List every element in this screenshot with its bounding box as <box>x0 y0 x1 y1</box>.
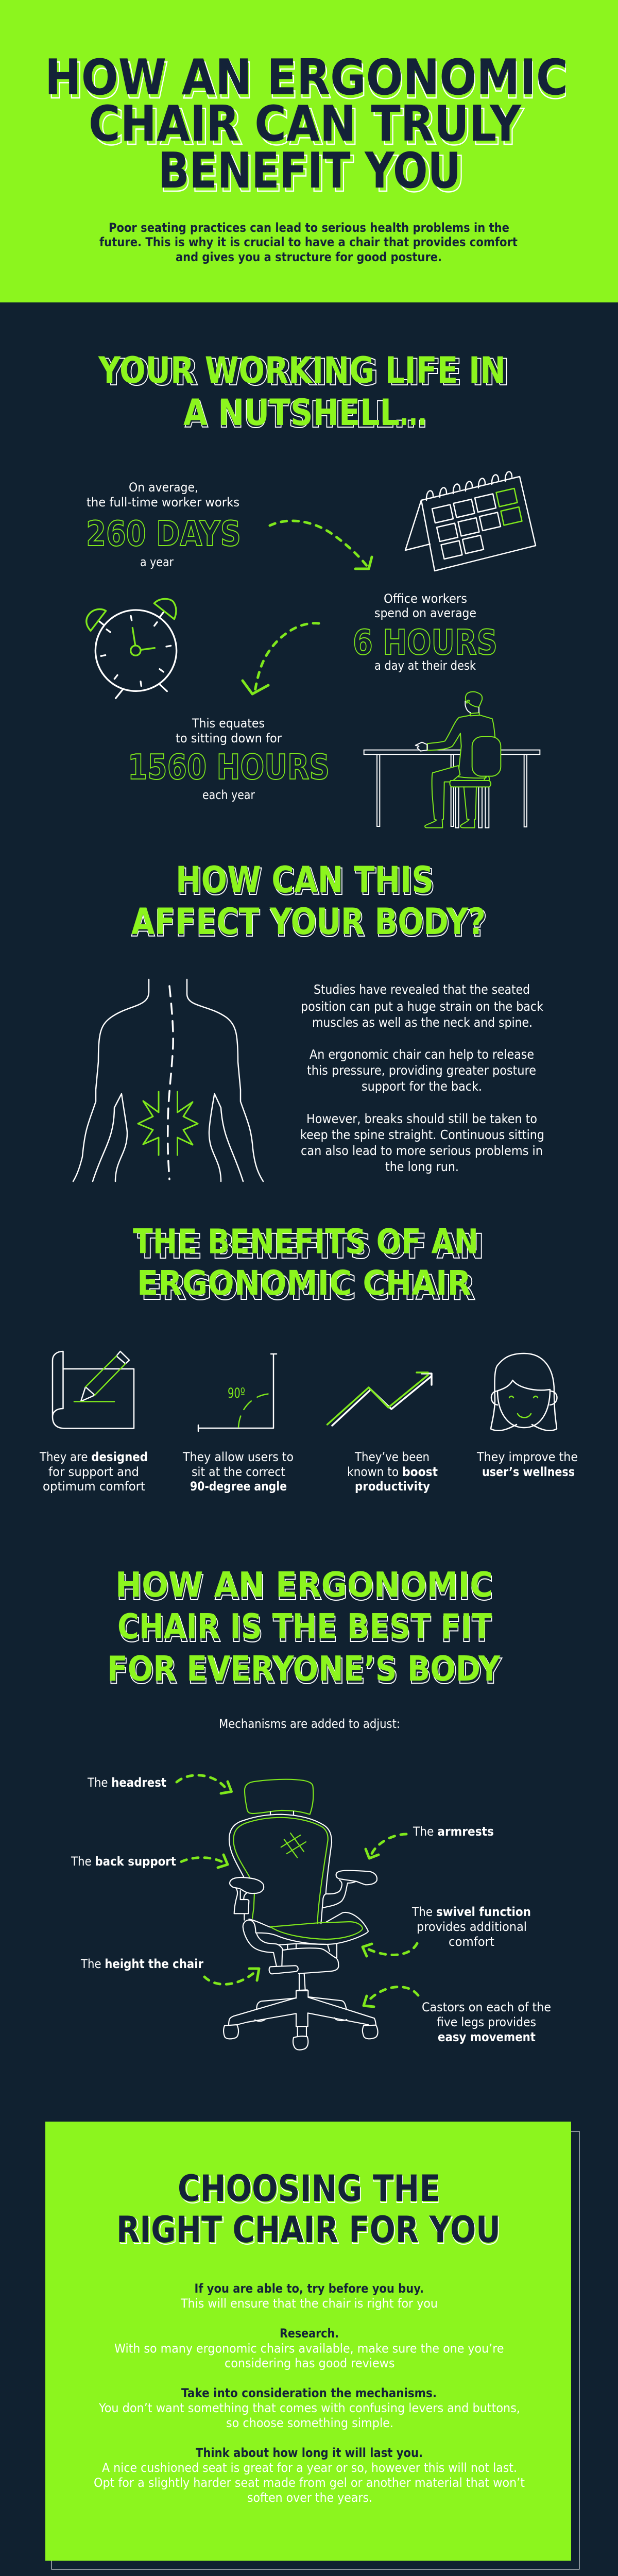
heading: choosing <box>116 2167 501 2252</box>
text block: body effects: the long run. <box>385 1159 459 1174</box>
stat: 260 days: a year <box>140 555 174 569</box>
heading: best fit for everyone: HOW AN ERGONOMIC <box>115 1565 493 1605</box>
tip: mechanisms: Take into consideration the mechanisms. <box>181 2386 437 2400</box>
tip: mechanisms: so choose something simple. <box>226 2416 393 2430</box>
label: height: The height the chair <box>80 1957 203 1971</box>
text block: body effects: this pressure, providing greater posture <box>307 1063 536 1078</box>
title: BENEFIT YOU <box>158 143 461 199</box>
heading: your working life: YOUR WORKING LIFE IN <box>98 349 506 392</box>
stat: 6 hours: 6 HOURS <box>353 622 497 663</box>
label: castors <box>364 1987 551 2044</box>
heading: your working life: A NUTSHELL <box>183 392 400 434</box>
heading: the benefits: THE BENEFITS OF AN <box>138 1227 484 1266</box>
label: castors: easy movement <box>438 2030 536 2044</box>
text: benefit angle: sit at the correct <box>192 1465 285 1479</box>
text: benefit wellness: They improve the <box>476 1450 578 1464</box>
heading: choosing: CHOOSING THE <box>178 2167 440 2210</box>
tip: how long it will last: soften over the years. <box>247 2490 372 2505</box>
label: castors: five legs provides <box>437 2015 536 2029</box>
tip: try before you buy: If you are able to, try before you buy. <box>195 2281 424 2296</box>
heading: best fit for everyone: FOR EVERYONE’S BODY <box>107 1649 501 1689</box>
heading: best fit for everyone <box>107 1565 502 1691</box>
text: benefit designed: for support and <box>48 1465 139 1479</box>
tip: research: considering has good reviews <box>225 2356 394 2370</box>
text: benefit productivity <box>347 1450 438 1494</box>
tip: how long it will last <box>94 2446 525 2505</box>
text: benefit designed: optimum comfort <box>43 1479 145 1494</box>
label: armrests <box>366 1824 494 1858</box>
heading: your working life: A NUTSHELL... <box>185 394 428 436</box>
tip: mechanisms <box>98 2386 520 2430</box>
text: benefit productivity: productivity <box>355 1479 430 1494</box>
tip: research: With so many ergonomic chairs available, make sure the one you’re <box>114 2341 504 2355</box>
text block: body effects: can also lead to more serious problems in <box>301 1143 543 1158</box>
heading: how can this affect your body: HOW CAN THIS <box>177 861 435 903</box>
heading: the benefits: ERGONOMIC CHAIR <box>137 1263 471 1303</box>
label: back support: The back support <box>71 1854 176 1869</box>
text: benefit designed: They are designed <box>39 1450 148 1464</box>
text: benefit angle: They allow users to <box>182 1450 294 1464</box>
panel: choosing the right chair <box>45 2122 579 2569</box>
heading: best fit for everyone: CHAIR IS THE BEST FIT <box>119 1609 492 1650</box>
stat: 1560 hours: each year <box>202 788 255 802</box>
heading: best fit for everyone: HOW AN ERGONOMIC <box>116 1568 493 1608</box>
heading: choosing: CHOOSING THE <box>179 2169 440 2211</box>
icon: 90 degree angle: 90º <box>228 1385 245 1401</box>
heading: best fit for everyone: FOR EVERYONE’S BODY <box>108 1651 502 1691</box>
stat: 260 days <box>86 480 241 569</box>
title <box>45 49 568 203</box>
tip: how long it will last: Think about how long it will last you. <box>196 2446 423 2460</box>
heading: your working life <box>98 349 509 436</box>
stat: 6 hours: Office workers <box>384 591 467 606</box>
heading: your working life: YOUR WORKING LIFE IN <box>102 351 509 394</box>
text: benefit angle <box>182 1450 294 1494</box>
arrow: clock to hours <box>243 623 319 694</box>
text: benefit productivity: They’ve been <box>354 1450 430 1464</box>
text block: body effects: Studies have revealed that the seated <box>314 982 530 997</box>
icon: person at desk <box>364 692 540 828</box>
label: castors: Castors on each of the <box>422 2000 551 2014</box>
icon: 90 degree angle <box>198 1354 277 1431</box>
heading: the benefits <box>133 1222 484 1308</box>
arrow: days to calendar <box>270 521 372 569</box>
title: BENEFIT YOU <box>160 146 465 203</box>
stat: 260 days: 260 DAYS <box>86 514 241 554</box>
heading: the benefits: THE BENEFITS OF AN <box>133 1222 478 1261</box>
title: HOW AN ERGONOMIC <box>45 49 568 106</box>
heading: how can this affect your body: AFFECT YOUR BODY? <box>131 903 487 945</box>
label: armrests: The armrests <box>413 1824 494 1839</box>
tip: try before you buy <box>180 2281 438 2311</box>
stat: 260 days: the full-time worker works <box>87 495 239 510</box>
stat: 6 hours: a day at their desk <box>374 658 476 673</box>
tip: research <box>114 2326 504 2370</box>
tip: mechanisms: You don’t want something that comes with confusing levers and buttons, <box>98 2401 520 2415</box>
text block: body effects: muscles as well as the neck and spine. <box>312 1015 533 1030</box>
text: benefit wellness: user’s wellness <box>482 1465 575 1479</box>
text block: body effects <box>300 982 544 1174</box>
stat: 6 hours: spend on average <box>374 606 476 620</box>
label: swivel function: provides additional <box>417 1920 527 1934</box>
stat: 6 hours <box>353 591 497 673</box>
label: swivel function <box>363 1905 531 1956</box>
label: headrest: The headrest <box>87 1775 166 1790</box>
text block: body effects: position can put a huge strain on the back <box>301 999 543 1014</box>
icon: calendar <box>405 472 536 571</box>
heading: your working life: ... <box>400 392 427 434</box>
icon: alarm clock <box>87 599 177 698</box>
text: benefit designed <box>39 1450 148 1494</box>
icon: woman face <box>491 1353 557 1431</box>
heading: choosing: RIGHT CHAIR FOR YOU <box>116 2209 501 2251</box>
label: swivel function: comfort <box>449 1935 494 1949</box>
icon: blueprint and pencil <box>53 1351 134 1428</box>
label: headrest <box>87 1775 231 1793</box>
text: benefit wellness <box>476 1450 578 1479</box>
heading: best fit for everyone: CHAIR IS THE BEST FIT <box>117 1606 492 1647</box>
text block: body effects: An ergonomic chair can help to release <box>310 1047 534 1062</box>
tip: try before you buy: This will ensure that the chair is right for you <box>180 2296 438 2311</box>
heading: choosing: RIGHT CHAIR FOR YOU <box>118 2210 501 2252</box>
intro text <box>99 221 518 264</box>
chart: chair lower <box>224 1912 378 2050</box>
text: benefit productivity: known to boost <box>347 1465 438 1479</box>
text: benefit angle: 90-degree angle <box>190 1479 287 1494</box>
intro text: future. This is why it is crucial to have a chair that provides comfort <box>99 235 518 249</box>
text block: body effects: keep the spine straight. Continuous sitting <box>300 1127 544 1142</box>
stat: 1560 hours: 1560 HOURS <box>128 747 330 787</box>
label: swivel function: The swivel function <box>411 1905 531 1919</box>
tip: how long it will last: A nice cushioned seat is great for a year or so, however this will not last. <box>102 2461 517 2475</box>
panel: header <box>0 0 618 302</box>
stat: 260 days: On average, <box>129 480 198 495</box>
icon: rising chart <box>328 1372 432 1426</box>
title: HOW AN ERGONOMIC <box>47 53 568 110</box>
stat: 1560 hours: This equates <box>192 716 265 731</box>
heading: how can this affect your body <box>131 859 487 945</box>
title: CHAIR CAN TRULY <box>92 99 524 156</box>
text block: body effects: support for the back. <box>362 1079 482 1094</box>
icon: back and spine <box>73 979 263 1181</box>
text block: body effects: However, breaks should still be taken to <box>306 1111 537 1126</box>
title: CHAIR CAN TRULY <box>89 96 522 152</box>
heading: the benefits: ERGONOMIC CHAIR <box>141 1268 475 1308</box>
stat: 1560 hours <box>128 716 330 802</box>
intro text: and gives you a structure for good posture. <box>176 250 442 264</box>
heading: how can this affect your body: AFFECT YOUR BODY? <box>131 901 486 943</box>
tip: how long it will last: Opt for a slightly harder seat made from gel or another material that won’t <box>94 2476 525 2490</box>
chart: chair upper <box>229 1780 377 1923</box>
heading: how can this affect your body: HOW CAN THIS <box>176 859 434 901</box>
tip: research: Research. <box>280 2326 339 2341</box>
stat: 1560 hours: to sitting down for <box>176 731 282 745</box>
text: mechanisms intro: Mechanisms are added to adjust: <box>219 1717 400 1731</box>
label: height <box>80 1957 259 1984</box>
intro text: Poor seating practices can lead to serious health problems in the <box>109 221 509 235</box>
